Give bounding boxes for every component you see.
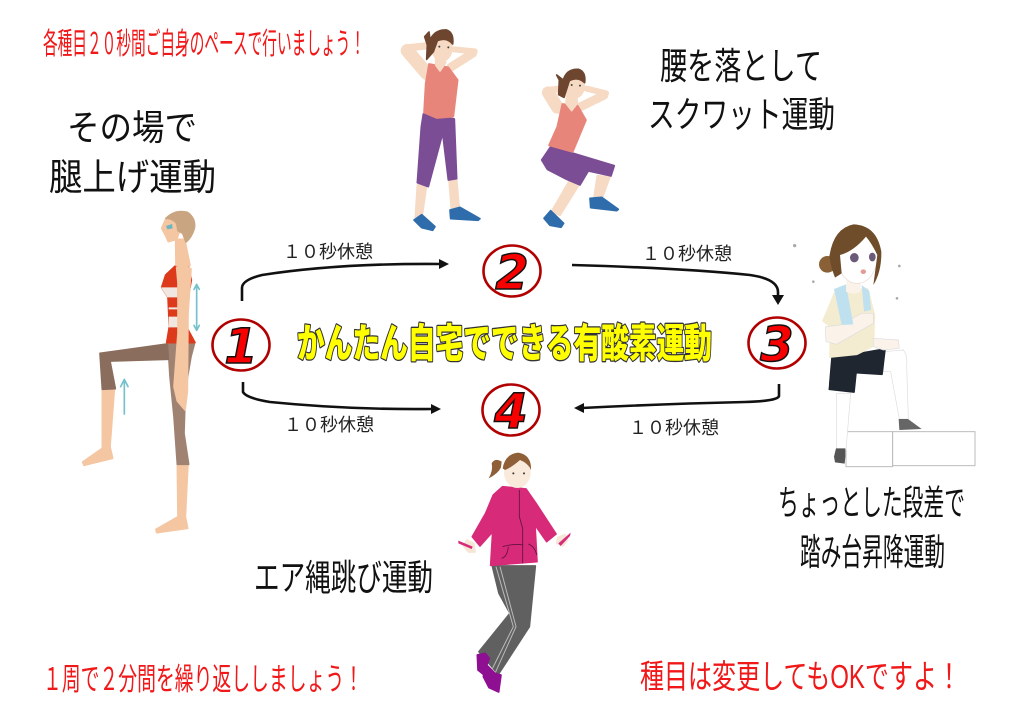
step badge 3: [748, 317, 806, 373]
step badge 3: 3: [760, 317, 794, 373]
arrow: 1 to 4: [243, 382, 441, 414]
label: exercise 2: 腰を落として: [660, 46, 822, 87]
note: repeat: １周で２分間を繰り返ししましょう！: [43, 662, 363, 697]
figure 4: air rope jumping: [458, 453, 571, 692]
label: exercise 3: [778, 484, 965, 573]
rest label: 3 to 4: １０秒休憩: [629, 418, 719, 438]
text: 各種目２０秒間ご自身のペースで行いましょう！: [43, 28, 365, 61]
label: exercise 1: 腿上げ運動: [49, 157, 216, 198]
title: かんたん自宅でできる有酸素運動: [297, 322, 712, 366]
rest label: 1 to 2: １０秒休憩: [283, 242, 373, 262]
rest label: 1 to 4: １０秒休憩: [284, 415, 374, 435]
step box: [846, 432, 975, 467]
label: exercise 2: [648, 46, 835, 135]
arrow: 1 to 2: [242, 259, 449, 301]
step badge 1: [212, 319, 270, 375]
squatting woman: [542, 69, 618, 227]
label: exercise 1: その場で: [67, 107, 197, 148]
figure 3: girl on step: [793, 224, 975, 467]
step badge 2: [484, 245, 540, 301]
step badge 4: 4: [493, 384, 528, 440]
label: exercise 1: [49, 107, 216, 198]
step badge 2: 2: [495, 245, 529, 301]
step badge 4: [482, 384, 540, 440]
arrow: 3 to 4: [574, 384, 779, 413]
figure 2: squat women: [406, 30, 618, 230]
standing woman: [406, 30, 480, 230]
label: exercise 4: エア縄跳び運動: [254, 557, 433, 598]
rest label: 2 to 3: １０秒休憩: [642, 244, 732, 264]
step badge 1: 1: [224, 319, 258, 375]
figure 1: high knee woman: [83, 212, 199, 533]
label: exercise 2: スクワット運動: [648, 94, 835, 135]
arrow: 2 to 3: [572, 265, 784, 305]
